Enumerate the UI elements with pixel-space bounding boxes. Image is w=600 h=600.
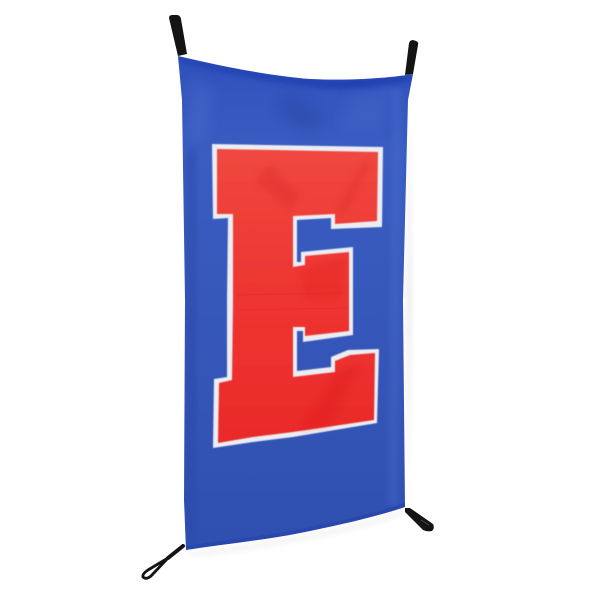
letter E xyxy=(212,144,383,448)
bottom hem xyxy=(186,503,405,550)
panel: blue banner xyxy=(170,50,420,560)
letter E red fill xyxy=(217,149,378,443)
soft shadow xyxy=(190,90,412,556)
loop: bottom right xyxy=(405,508,434,531)
fabric folds xyxy=(186,80,402,540)
strap: top left xyxy=(169,15,187,56)
top hem xyxy=(178,56,413,88)
loop: bottom left xyxy=(143,546,183,578)
fold shading on letter xyxy=(236,160,372,430)
strap: top right xyxy=(405,40,418,75)
letter E white outline xyxy=(212,144,383,448)
banner illustration xyxy=(141,15,434,580)
